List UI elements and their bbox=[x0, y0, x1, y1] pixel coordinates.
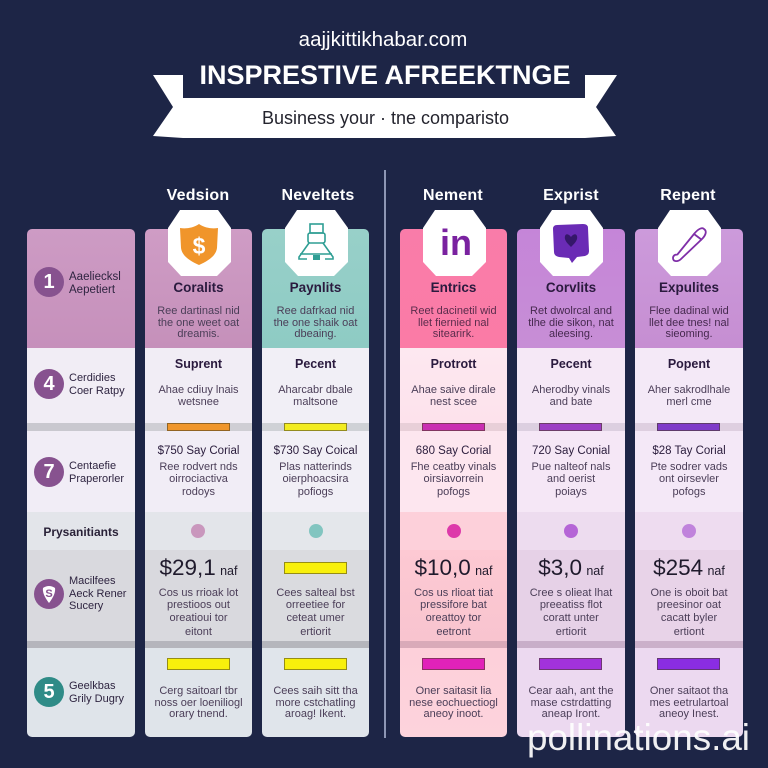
description bbox=[414, 587, 493, 638]
row label 4: Cerdidies bbox=[69, 372, 115, 384]
description bbox=[157, 305, 240, 340]
price line: 720 Say Conial bbox=[532, 445, 610, 457]
description: Cear aah, ant the bbox=[528, 685, 614, 697]
description: sieoming. bbox=[665, 328, 713, 340]
description: Ret dwolrcal and bbox=[530, 305, 612, 317]
price: $254 naf bbox=[653, 555, 725, 580]
description: and oerist bbox=[547, 473, 595, 485]
row label 5: Grily Dugry bbox=[69, 692, 124, 704]
description bbox=[635, 686, 743, 721]
row label 7: Praperorler bbox=[69, 472, 124, 484]
row label 1 bbox=[34, 267, 121, 297]
heading: Expulites bbox=[659, 280, 719, 295]
column heading: Repent: Repent bbox=[660, 187, 716, 204]
icon: purple in logo bbox=[422, 210, 486, 276]
row label 5: 5 bbox=[43, 681, 55, 703]
icon: violet chat bubble with heart bbox=[539, 210, 603, 276]
description: more cstchatling bbox=[275, 697, 356, 709]
description: merl cme bbox=[666, 396, 712, 408]
description: orreetiee for bbox=[286, 599, 345, 611]
bar: yellow bbox=[284, 658, 347, 670]
panel: Corvlits column bbox=[517, 229, 625, 737]
description: Cerg saitoarl tbr bbox=[159, 685, 238, 697]
description: ont oirsevler bbox=[659, 473, 719, 485]
row label 7: Centaefie bbox=[69, 460, 116, 472]
description: aneoy inoot. bbox=[424, 708, 483, 720]
description bbox=[409, 685, 498, 720]
description bbox=[532, 384, 610, 408]
description: aroag! Ikent. bbox=[285, 708, 346, 720]
description: oreatioui tor bbox=[169, 612, 228, 624]
description bbox=[279, 461, 352, 498]
heading: Paynlits bbox=[290, 280, 341, 295]
description: prestioos out bbox=[167, 599, 230, 611]
description bbox=[159, 587, 238, 638]
description: maltsone bbox=[293, 396, 338, 408]
sub heading: Protrott bbox=[431, 357, 476, 371]
description: eitont bbox=[185, 626, 212, 638]
description: aneoy Inest. bbox=[659, 708, 719, 720]
description: oreattoy tor bbox=[426, 612, 481, 624]
dot marker bbox=[682, 524, 696, 538]
title: INSPRESTIVE AFREEKTNGE bbox=[199, 60, 571, 90]
description bbox=[158, 384, 239, 408]
description: Aharcabr dbale bbox=[278, 384, 353, 396]
description bbox=[154, 685, 243, 720]
description: pressifore bat bbox=[420, 599, 487, 611]
row label 4: 4 bbox=[43, 373, 55, 395]
description: preesinor oat bbox=[657, 599, 721, 611]
description bbox=[159, 461, 238, 498]
description: Ahae cdiuy lnais bbox=[158, 384, 239, 396]
description: cacatt byler bbox=[661, 612, 717, 624]
row label 9: Macilfees bbox=[69, 575, 115, 587]
description bbox=[528, 685, 614, 720]
description bbox=[649, 305, 729, 340]
price: $3,0 naf bbox=[538, 555, 604, 580]
description: Ree dafrkad nid bbox=[277, 305, 354, 317]
description: mase cstrdatting bbox=[531, 697, 611, 709]
description: One is oboit bat bbox=[650, 587, 728, 599]
description: coratt unter bbox=[543, 612, 599, 624]
description: mes eetrulartoal bbox=[650, 697, 728, 709]
heading: Entrics bbox=[431, 280, 476, 295]
description: Pue nalteof nals bbox=[532, 461, 610, 473]
icon: purple in logo: in bbox=[440, 222, 472, 263]
description: ertiont bbox=[674, 626, 704, 638]
description bbox=[278, 384, 353, 408]
price: $29,1 naf bbox=[160, 555, 237, 580]
description: ertiorit bbox=[300, 626, 331, 638]
description: pofiogs bbox=[298, 486, 333, 498]
description: Ree dartinasl nid bbox=[157, 305, 240, 317]
row label 9: Aeck Rener bbox=[69, 588, 126, 600]
dot marker bbox=[309, 524, 323, 538]
bar: purple bbox=[539, 658, 602, 670]
center divider bbox=[384, 170, 386, 738]
description bbox=[532, 461, 610, 498]
description: poiays bbox=[555, 486, 587, 498]
ribbon banner with subtitle bbox=[153, 75, 617, 138]
description: dbeaing. bbox=[294, 328, 337, 340]
description bbox=[528, 305, 614, 340]
description: ertiorit bbox=[556, 626, 586, 638]
description: pofogs bbox=[437, 486, 470, 498]
panel: Entrics column bbox=[400, 229, 507, 737]
column heading: Vedsion: Vedsion bbox=[167, 187, 229, 204]
description bbox=[411, 461, 496, 498]
dot marker bbox=[191, 524, 205, 538]
row label 1: Aepetiert bbox=[69, 284, 115, 296]
sub heading: Pecent bbox=[295, 357, 336, 371]
heading: Coralits bbox=[173, 280, 224, 295]
bar: violet bbox=[657, 423, 720, 431]
description bbox=[273, 685, 358, 720]
site name: aajjkittikhabar.com bbox=[299, 28, 467, 51]
row label 9: Sucery bbox=[69, 600, 103, 612]
description: sitearirk. bbox=[433, 328, 474, 340]
description: llet dee tnes! nal bbox=[649, 317, 729, 329]
description: dreamis. bbox=[177, 328, 220, 340]
price line: $730 Say Coical bbox=[274, 445, 357, 457]
description: nest scee bbox=[430, 396, 477, 408]
icon: teal machine outline bbox=[284, 210, 348, 276]
panel: Paynlits column bbox=[262, 229, 369, 737]
row label 4: Coer Ratpy bbox=[69, 384, 125, 396]
bar: magenta bbox=[422, 423, 485, 431]
description bbox=[274, 305, 358, 340]
subtitle: Business your · tne comparisto bbox=[262, 108, 509, 128]
dot marker bbox=[564, 524, 578, 538]
column heading: Nement: Nement bbox=[423, 187, 483, 204]
description: Aher sakrodlhale bbox=[648, 384, 730, 396]
heading: Corvlits bbox=[546, 280, 596, 295]
description: ceteat umer bbox=[286, 612, 345, 624]
panel: row labels bbox=[27, 229, 135, 737]
description: Pte sodrer vads bbox=[650, 461, 728, 473]
watermark: pollinations.ai bbox=[527, 717, 750, 758]
row label 9 bbox=[34, 575, 126, 612]
description: Ahae saive dirale bbox=[411, 384, 496, 396]
panel: Expulites column bbox=[635, 229, 743, 737]
sub heading: Pecent bbox=[550, 357, 592, 371]
row label 1: Aaeliecksl bbox=[69, 271, 121, 283]
description: Cees salteal bst bbox=[276, 587, 355, 599]
description: Oner saitasit lia bbox=[416, 685, 491, 697]
description: and bate bbox=[550, 396, 592, 408]
row label Prysanitiants: Prysanitiants bbox=[43, 525, 119, 539]
description: tlhe die sikon, nat bbox=[528, 317, 614, 329]
bar: yellow bbox=[284, 562, 347, 574]
description: Cees saih sitt tha bbox=[273, 685, 358, 697]
description bbox=[648, 384, 730, 408]
row label 7: 7 bbox=[43, 461, 55, 483]
column heading: Exprist: Exprist bbox=[543, 187, 599, 204]
bar: violet bbox=[657, 658, 720, 670]
bar: yellow bbox=[167, 658, 230, 670]
description: llet fiernied nal bbox=[418, 317, 489, 329]
bar: yellow bbox=[284, 423, 347, 431]
description: aneap Iront. bbox=[542, 708, 600, 720]
description bbox=[276, 587, 355, 638]
bar: orange bbox=[167, 423, 230, 431]
sub heading: Suprent bbox=[175, 357, 222, 371]
icon: orange shield with dollar: $ bbox=[193, 233, 206, 259]
bar: magenta bbox=[422, 658, 485, 670]
description: oirsiavorrein bbox=[424, 473, 483, 485]
price: $10,0 naf bbox=[415, 555, 492, 580]
column heading: Neveltets: Neveltets bbox=[282, 187, 354, 204]
row label 5: Geelkbas bbox=[69, 680, 115, 692]
sub heading: Popent bbox=[668, 357, 710, 371]
description: Cos us rlioat tiat bbox=[414, 587, 493, 599]
icon: purple pin bbox=[657, 210, 721, 276]
description: aleesing. bbox=[549, 328, 593, 340]
bar: purple bbox=[539, 423, 602, 431]
panel: Coralits column bbox=[145, 229, 252, 737]
description: wetsnee bbox=[178, 396, 219, 408]
description bbox=[411, 384, 496, 408]
description: nese eochuectiogl bbox=[409, 697, 498, 709]
description: Plas natterinds bbox=[279, 461, 352, 473]
row label 7 bbox=[34, 457, 124, 487]
description bbox=[530, 587, 612, 638]
description bbox=[650, 461, 728, 498]
row label 4 bbox=[34, 369, 125, 399]
price line: $750 Say Corial bbox=[158, 445, 239, 457]
row label 1: 1 bbox=[43, 271, 55, 293]
description: noss oer loeniliogl bbox=[154, 697, 243, 709]
description: eetront bbox=[436, 626, 471, 638]
description: Flee dadinal wid bbox=[649, 305, 729, 317]
description: Cree s olieat lhat bbox=[530, 587, 612, 599]
description: preeatiss flot bbox=[540, 599, 602, 611]
price line: 680 Say Corial bbox=[416, 445, 491, 457]
description: Fhe ceatby vinals bbox=[411, 461, 496, 473]
description: Cos us rrioak lot bbox=[159, 587, 238, 599]
description: rodoys bbox=[182, 486, 215, 498]
description: pofogs bbox=[672, 486, 706, 498]
description bbox=[650, 587, 728, 638]
description: orary tnend. bbox=[169, 708, 228, 720]
description: oirrociactiva bbox=[169, 473, 228, 485]
description: Reet dacinetil wid bbox=[410, 305, 497, 317]
icon: orange shield with dollar bbox=[167, 210, 231, 276]
description: oierphoacsira bbox=[282, 473, 349, 485]
price line: $28 Tay Corial bbox=[652, 445, 726, 457]
row label 9: S bbox=[45, 588, 53, 600]
description: Aherodby vinals bbox=[532, 384, 610, 396]
row label 5 bbox=[34, 677, 124, 707]
description: Ree rodvert nds bbox=[159, 461, 238, 473]
description: the one shaik oat bbox=[274, 317, 357, 329]
description: the one weet oat bbox=[158, 317, 239, 329]
dot marker bbox=[447, 524, 461, 538]
description: Oner saitaot tha bbox=[650, 685, 728, 697]
description bbox=[410, 305, 497, 340]
